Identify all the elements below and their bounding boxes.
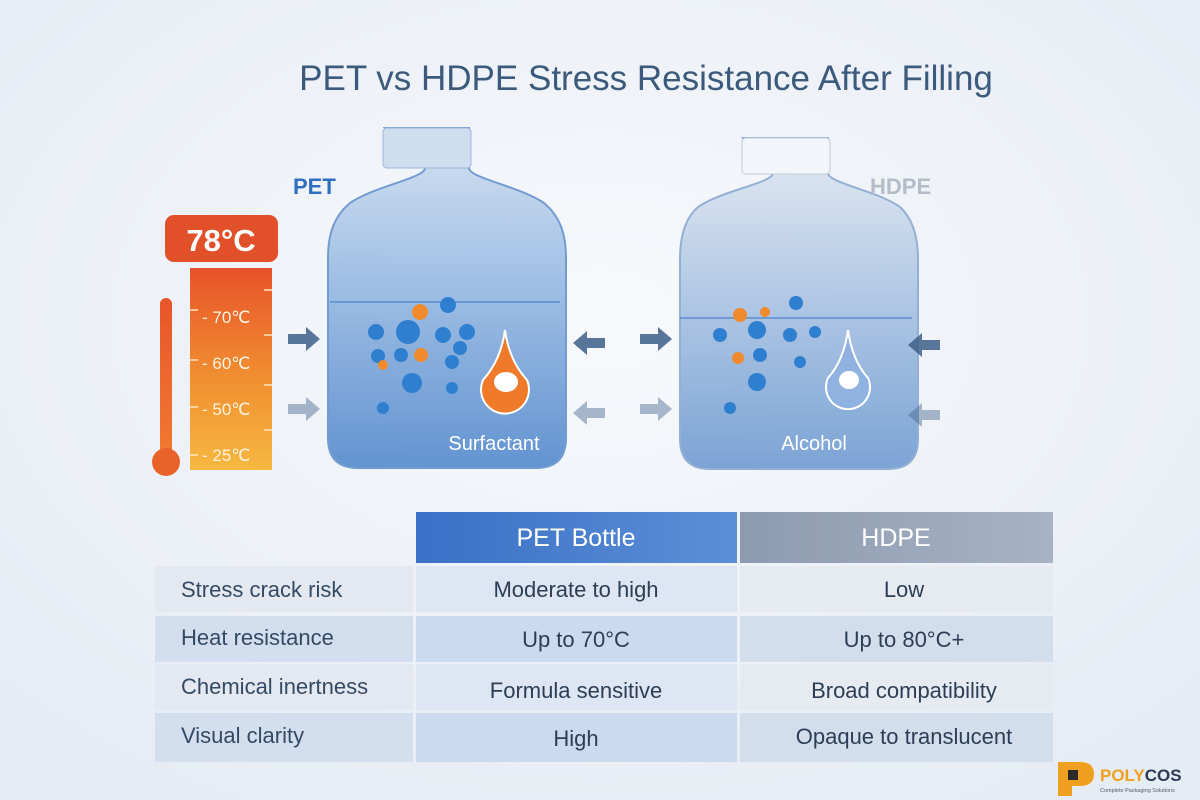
row: stress crack: Moderate to high	[493, 577, 659, 602]
temperature scale: - 60℃	[202, 354, 250, 373]
temperature badge: 78°C	[186, 223, 256, 258]
comparison table	[155, 512, 1053, 762]
row: clarity: Opaque to translucent	[796, 724, 1012, 749]
molecules	[368, 297, 475, 414]
row: chemical: Chemical inertness	[181, 674, 368, 699]
table header: HDPE	[861, 524, 931, 552]
row: heat: Heat resistance	[181, 625, 334, 650]
logo	[1058, 762, 1182, 796]
row: heat: Up to 70°C	[522, 627, 630, 652]
table header: PET Bottle	[516, 524, 636, 552]
row: clarity	[155, 713, 1053, 762]
row: clarity: High	[553, 726, 599, 751]
label PET: PET	[293, 174, 336, 199]
temperature badge	[165, 215, 278, 262]
HDPE bottle	[680, 138, 931, 469]
row: heat	[155, 616, 1053, 662]
HDPE bottle: Alcohol	[781, 433, 847, 455]
row: stress crack	[155, 566, 1053, 612]
label HDPE: HDPE	[870, 174, 931, 199]
pressure arrows	[288, 327, 940, 427]
logo: Complete Packaging Solutions	[1100, 788, 1175, 794]
temperature scale	[190, 268, 272, 470]
temperature scale: - 70℃	[202, 308, 250, 327]
temperature scale: - 25℃	[202, 446, 250, 465]
row: chemical	[155, 664, 1053, 710]
temperature scale: - 50℃	[202, 400, 250, 419]
drop icon	[481, 330, 529, 414]
PET bottle: Surfactant	[448, 433, 540, 455]
title: PET vs HDPE Stress Resistance After Filling	[299, 59, 993, 98]
thermometer	[152, 215, 278, 476]
PET bottle	[293, 128, 566, 468]
row: stress crack: Low	[884, 577, 924, 602]
thermometer tube	[152, 298, 180, 476]
row: chemical: Broad compatibility	[811, 678, 997, 703]
row: clarity: Visual clarity	[181, 723, 304, 748]
logo: POLYCOS	[1100, 766, 1182, 785]
row: stress crack: Stress crack risk	[181, 577, 343, 602]
table header	[416, 512, 1053, 563]
row: heat: Up to 80°C+	[844, 627, 964, 652]
row: chemical: Formula sensitive	[490, 678, 662, 703]
